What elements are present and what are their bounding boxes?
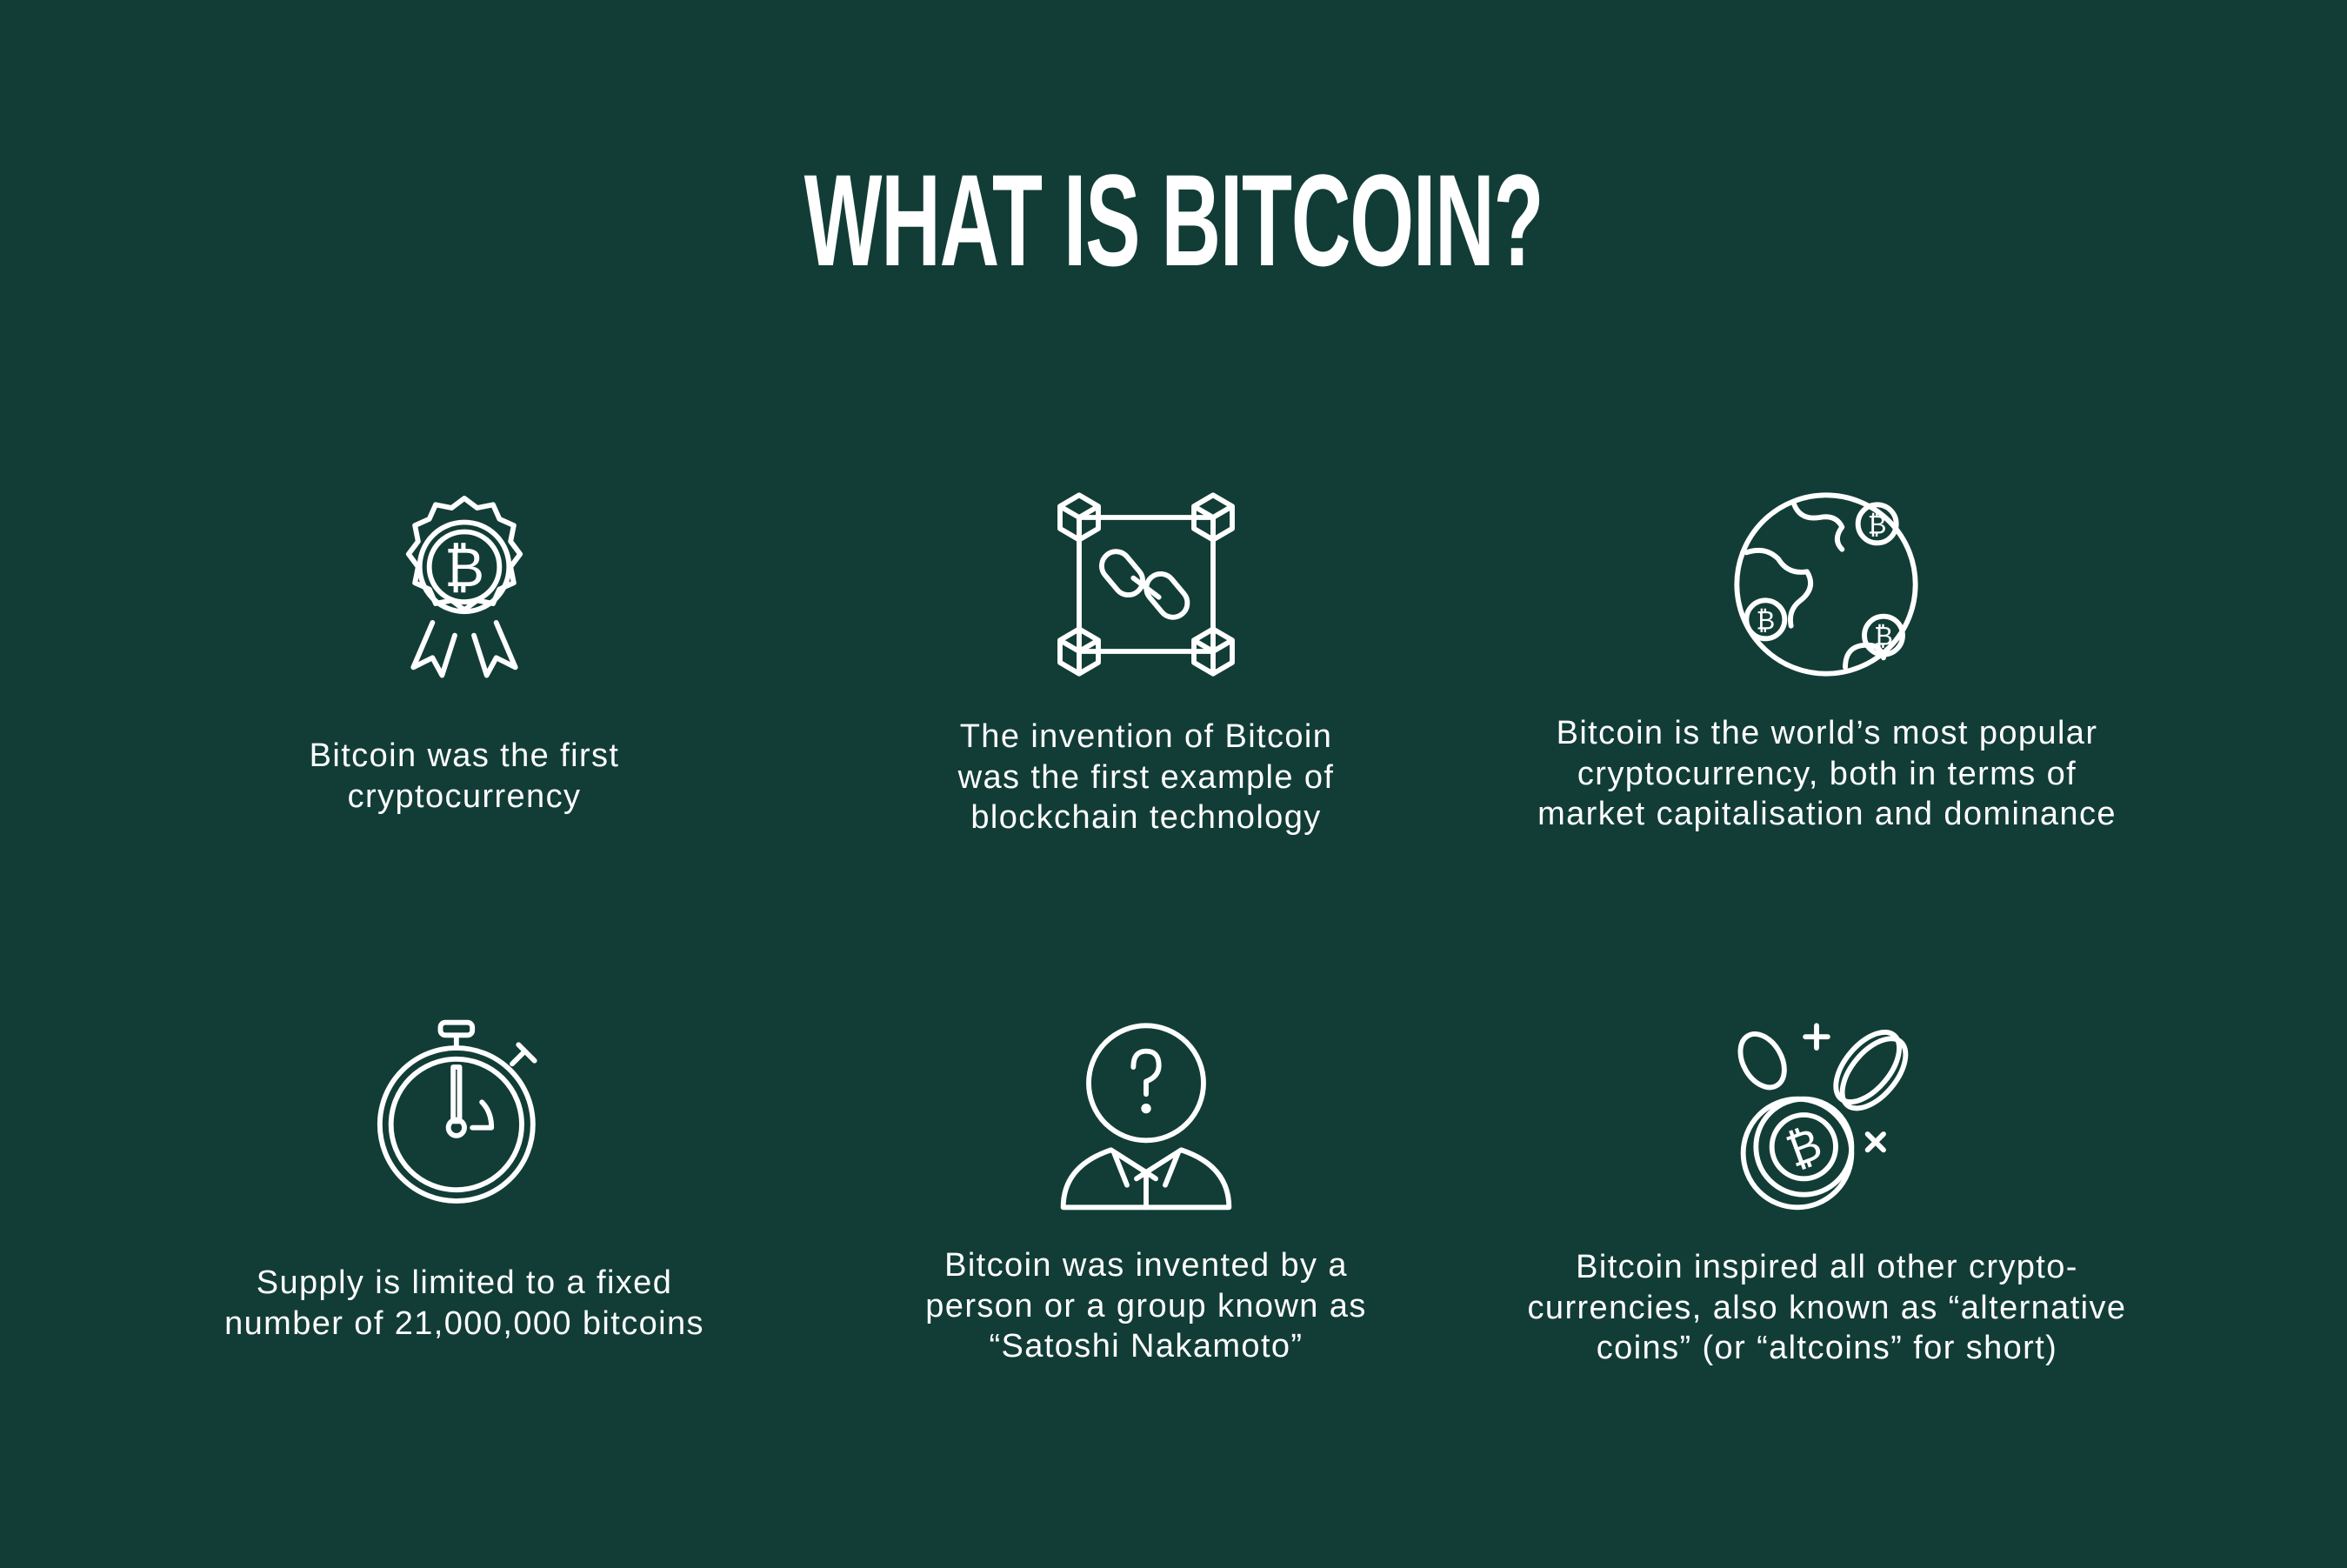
icon: globe with bitcoins <box>1734 492 1918 677</box>
text: satoshi <box>925 1247 1367 1364</box>
text: supply: Supply is limited to a fixed <box>257 1264 672 1301</box>
text: satoshi: Bitcoin was invented by a <box>944 1247 1348 1284</box>
text: first cryptocurrency: cryptocurrency <box>348 777 581 814</box>
icon: stopwatch <box>377 1019 537 1204</box>
text: most popular: Bitcoin is the world’s most popular <box>1557 715 2097 751</box>
icon: anonymous person <box>1061 1023 1231 1211</box>
text: altcoins: currencies, also known as “alternative <box>1528 1289 2126 1325</box>
icon: coins: ₿ <box>1780 1118 1828 1177</box>
text: most popular <box>1537 715 2117 832</box>
text: altcoins: coins” (or “altcoins” for short) <box>1597 1330 2057 1366</box>
text: first cryptocurrency <box>310 737 619 814</box>
text: supply: number of 21,000,000 bitcoins <box>224 1304 704 1341</box>
text: altcoins <box>1528 1249 2126 1366</box>
text: blockchain <box>958 718 1334 836</box>
text: satoshi: “Satoshi Nakamoto” <box>989 1328 1303 1364</box>
icon: coins <box>1737 1023 1908 1211</box>
text: blockchain: The invention of Bitcoin <box>960 718 1332 755</box>
icon: bitcoin award badge: ₿ <box>444 538 484 598</box>
text: blockchain: blockchain technology <box>970 799 1322 836</box>
text: satoshi: person or a group known as <box>925 1287 1367 1324</box>
icon: bitcoin award badge <box>405 496 523 678</box>
text: first cryptocurrency: Bitcoin was the first <box>310 737 619 774</box>
text: most popular: market capitalisation and dominance <box>1537 796 2117 832</box>
icon: globe with bitcoins: ₿ <box>1756 606 1775 635</box>
text: blockchain: was the first example of <box>958 758 1334 795</box>
title: WHAT IS BITCOIN? <box>804 147 1543 293</box>
icon: globe with bitcoins: ₿ <box>1874 623 1893 651</box>
icon: blockchain <box>1057 492 1235 677</box>
text: altcoins: Bitcoin inspired all other crypto- <box>1576 1249 2078 1285</box>
icon: globe with bitcoins: ₿ <box>1868 510 1887 539</box>
text: most popular: cryptocurrency, both in terms of <box>1577 755 2077 791</box>
text: supply <box>224 1264 704 1341</box>
